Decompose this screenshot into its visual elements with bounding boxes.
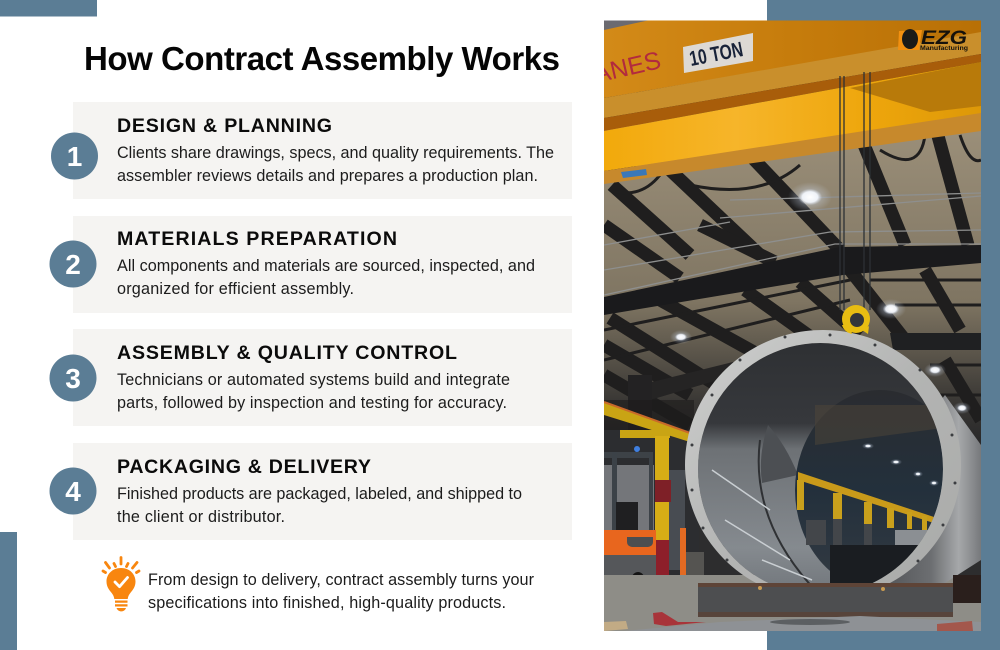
step number 1 (51, 132, 98, 180)
EZG logo: EZG (921, 28, 967, 49)
step number 2: 2 (65, 249, 81, 280)
step 1 description: Clients share drawings, specs, and quality requirements. The (117, 144, 554, 162)
brand lettering: ANES (591, 46, 664, 89)
ceiling lights (670, 182, 971, 414)
cylinder inner wall (698, 343, 943, 583)
step 4 heading: PACKAGING & DELIVERY (117, 456, 371, 478)
cylinder outer wall (870, 395, 981, 583)
view through cylinder (795, 390, 943, 582)
flange ring (685, 330, 961, 600)
step 3 heading: ASSEMBLY & QUALITY CONTROL (117, 342, 457, 364)
10 ton sign: 10 TON (688, 38, 745, 71)
steel I-beam support (698, 583, 953, 617)
panel: step 1 design and planning (51, 102, 572, 199)
crane girder (591, 20, 981, 184)
panel: step 4 packaging and delivery (50, 443, 572, 540)
step number 1: 1 (67, 141, 82, 172)
main roof beam (604, 245, 981, 315)
step number 2 (50, 240, 96, 288)
step number 4 (50, 468, 96, 514)
step 3 description (117, 371, 510, 412)
hoist cables (840, 72, 870, 310)
closing statement (148, 571, 535, 612)
step 2 description (117, 257, 535, 298)
ceiling (604, 120, 981, 460)
step number 3 (50, 354, 96, 402)
panel: step 3 assembly and quality control (50, 329, 572, 426)
background accent: bottom-left bar (0, 532, 17, 650)
step number 3: 3 (65, 363, 81, 394)
step 3 description: Technicians or automated systems build and integrate (117, 371, 510, 389)
title: How Contract Assembly Works (84, 40, 560, 77)
factory floor (604, 575, 981, 631)
closing statement: From design to delivery, contract assembly turns your (148, 571, 535, 589)
EZG logo (898, 28, 968, 52)
step 2 description: All components and materials are sourced, inspected, and (117, 257, 535, 275)
step 1 heading: DESIGN & PLANNING (117, 115, 332, 137)
step 1 description (117, 144, 554, 185)
foreground steel plate (604, 612, 981, 631)
step 1 description: assembler reviews details and prepares a production plan. (117, 167, 538, 185)
step 4 description: Finished products are packaged, labeled, and shipped to (117, 485, 522, 503)
steel cylinder (685, 330, 981, 600)
step 3 description: parts, followed by inspection and testing for accuracy. (117, 394, 507, 412)
background accent: top-left bar (0, 0, 97, 16)
left factory background with forklift (604, 402, 704, 584)
photo: steel cylinder lifted by overhead crane in factory (591, 20, 981, 631)
panel: step 2 materials preparation (50, 216, 572, 313)
step 4 description (117, 485, 522, 526)
step number 4: 4 (65, 476, 81, 507)
EZG logo: Manufacturing (920, 45, 968, 52)
step 2 description: organized for efficient assembly. (117, 280, 354, 298)
closing statement: specifications into finished, high-quality products. (148, 594, 506, 612)
step 4 description: the client or distributor. (117, 508, 285, 526)
step 2 heading: MATERIALS PREPARATION (117, 228, 397, 250)
yellow hoist hook block (842, 305, 870, 334)
background accent: right panel (767, 0, 1000, 650)
icon: light bulb with check mark (103, 558, 139, 611)
